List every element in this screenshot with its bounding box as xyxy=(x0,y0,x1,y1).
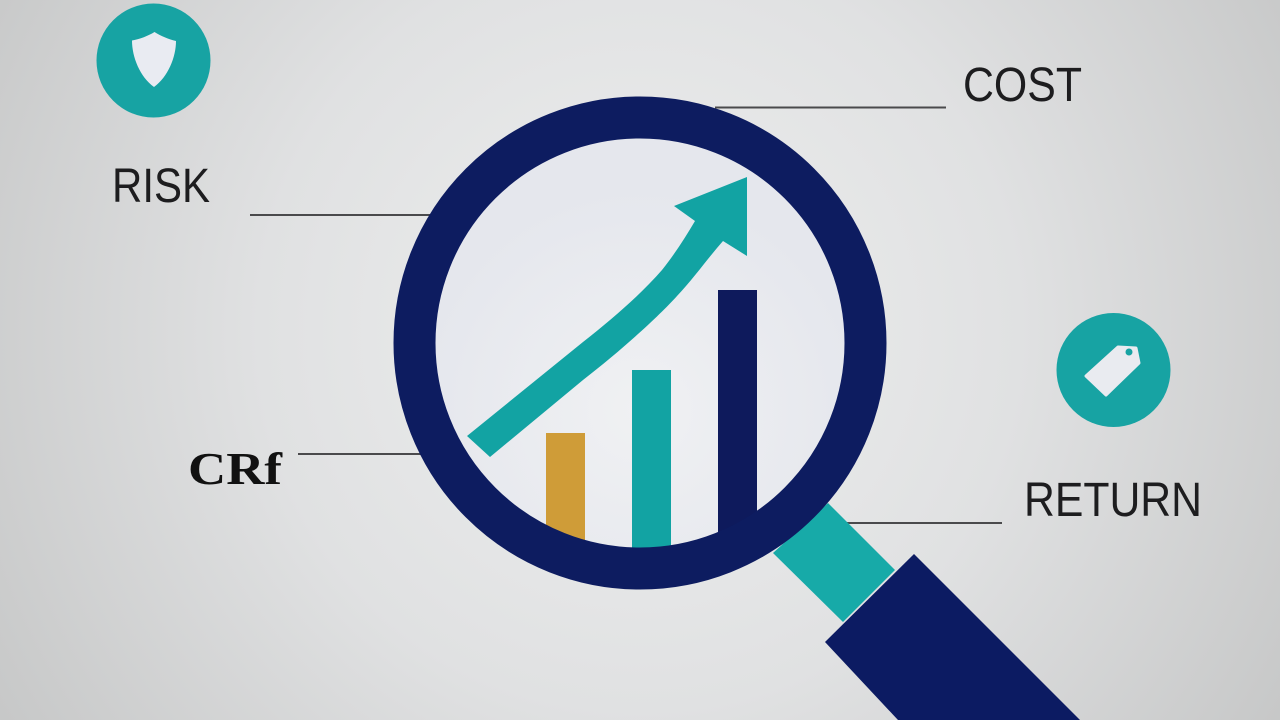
bar: teal xyxy=(632,370,671,560)
connector line: return xyxy=(845,522,1002,524)
handle neck xyxy=(773,503,895,622)
connector line: garbled label xyxy=(298,453,425,455)
handle grip xyxy=(825,554,1080,720)
icon: price tag badge xyxy=(1056,313,1170,427)
lens ring xyxy=(414,118,866,568)
rising arrow xyxy=(467,177,747,457)
magnifying glass xyxy=(414,118,1080,720)
icon: shield badge xyxy=(96,4,210,118)
label: cost: COST xyxy=(963,59,1082,112)
lens xyxy=(435,138,845,548)
bar: navy xyxy=(718,290,757,532)
bar: gold xyxy=(546,433,585,540)
label: risk: RISK xyxy=(112,160,210,213)
bar chart xyxy=(546,290,757,563)
label: return: RETURN xyxy=(1024,474,1202,527)
connector line: risk xyxy=(250,214,435,216)
label: garbled text: CRf xyxy=(188,443,283,494)
connector line: cost xyxy=(715,106,946,108)
